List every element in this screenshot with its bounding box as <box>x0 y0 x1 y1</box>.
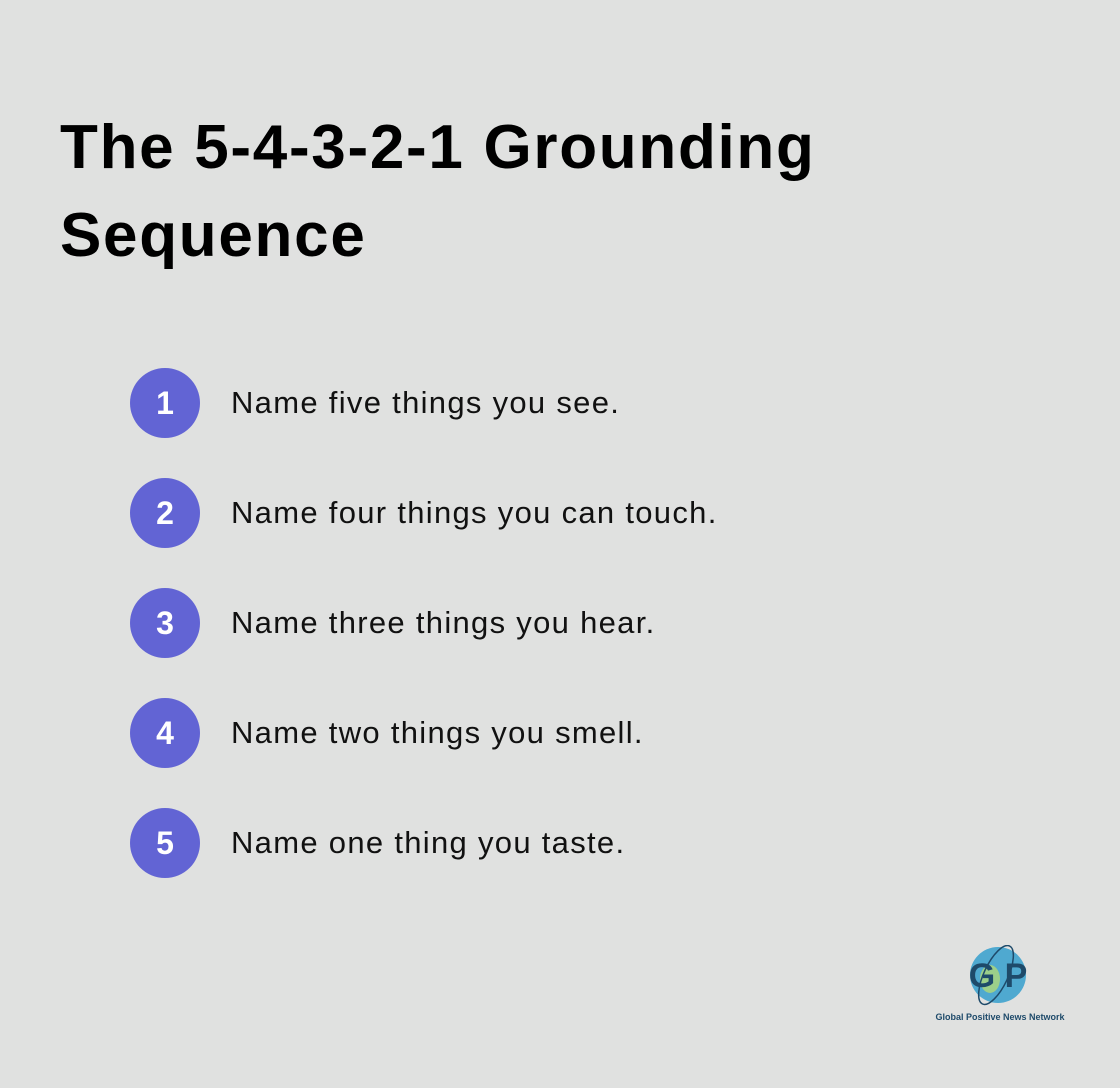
title: Sequence <box>60 201 366 270</box>
step 3: 3 <box>156 605 174 641</box>
step 4: Name two things you smell. <box>231 715 644 750</box>
logo: G P <box>969 957 1027 995</box>
step 5: Name one thing you taste. <box>231 825 625 860</box>
step 1 <box>130 368 620 438</box>
step 4: 4 <box>156 715 174 751</box>
step 2 <box>130 478 718 548</box>
step 5: 5 <box>156 825 174 861</box>
step 3 <box>130 588 656 658</box>
logo <box>935 945 1066 1022</box>
step 1: 1 <box>156 385 174 421</box>
title: The 5-4-3-2-1 Grounding <box>60 113 816 182</box>
step 4 <box>130 698 644 768</box>
logo: Global Positive News Network <box>935 1012 1066 1022</box>
title <box>60 113 816 270</box>
step 2: Name four things you can touch. <box>231 495 718 530</box>
step 3: Name three things you hear. <box>231 605 656 640</box>
step 2: 2 <box>156 495 174 531</box>
step 1: Name five things you see. <box>231 385 620 420</box>
step 5 <box>130 808 625 878</box>
